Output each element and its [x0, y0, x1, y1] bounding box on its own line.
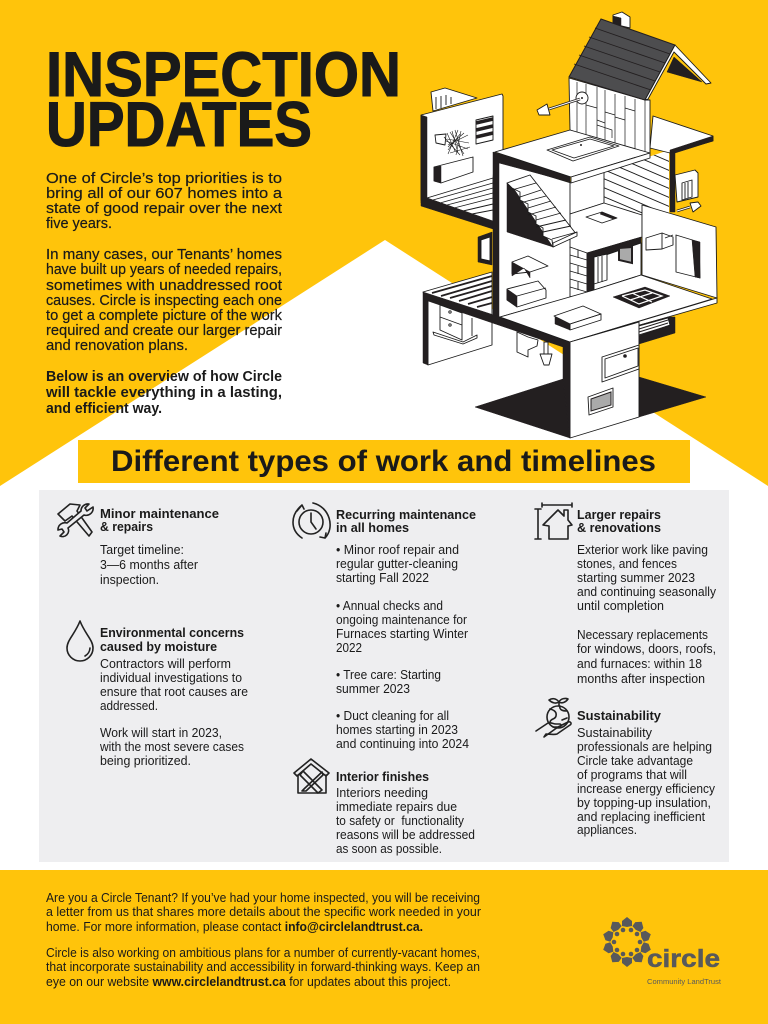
footer text: a letter from us that shares more details about the specific work needed in your — [46, 904, 482, 919]
section: recurring maintenance: • Duct cleaning for all — [336, 708, 449, 723]
section: recurring maintenance: starting Fall 2022 — [336, 570, 429, 585]
section: larger repairs: Exterior work like paving — [577, 542, 708, 557]
section: interior finishes: as soon as possible. — [336, 841, 442, 856]
icon: water drop — [67, 621, 93, 661]
intro text: Below is an overview of how Circle — [46, 369, 282, 385]
chimney — [613, 12, 630, 28]
section: environmental concerns: individual investigations to — [100, 670, 242, 685]
section: interior finishes: Interiors needing — [336, 785, 428, 800]
section: environmental concerns: Contractors will perform — [100, 656, 231, 671]
icon: hammer and wrench — [58, 504, 93, 537]
heading band: Different types of work and timelines — [111, 445, 656, 478]
section: environmental concerns: Environmental concerns — [100, 625, 244, 640]
section: interior finishes: reasons will be addressed — [336, 827, 475, 842]
shadow under house — [475, 377, 706, 438]
house illustration — [421, 12, 717, 438]
footer text — [46, 890, 482, 989]
section: environmental concerns: Work will start in 2023, — [100, 725, 222, 740]
section: environmental concerns: being prioritized. — [100, 753, 191, 768]
staircase — [507, 175, 577, 247]
intro text: and renovation plans. — [46, 338, 188, 354]
section: interior finishes: to safety or functionality — [336, 813, 464, 828]
lower left wing — [423, 272, 570, 365]
icon: clock with arrows — [293, 503, 330, 538]
right upper wing — [604, 116, 714, 214]
section: minor maintenance: 3—6 months after — [100, 557, 199, 572]
low steps and shelf — [507, 256, 548, 307]
section: sustainability: of programs that will — [577, 767, 687, 782]
right room — [642, 205, 717, 298]
section: larger repairs: and furnaces: within 18 — [577, 656, 702, 671]
section: recurring maintenance: summer 2023 — [336, 681, 410, 696]
section: larger repairs: until completion — [577, 598, 664, 613]
section: larger repairs: Larger repairs — [577, 507, 661, 522]
footer background — [0, 870, 768, 1024]
section: larger repairs: for windows, doors, roofs, — [577, 641, 716, 656]
intro text: state of good repair over the next — [46, 201, 282, 217]
footer text: Are you a Circle Tenant? If you’ve had your home inspected, you will be receiving — [46, 890, 480, 905]
section: recurring maintenance — [336, 507, 476, 751]
section: minor maintenance: & repairs — [100, 519, 153, 534]
section: sustainability: Sustainability — [577, 725, 652, 740]
logo wordmark — [647, 945, 722, 986]
section: recurring maintenance: 2022 — [336, 640, 362, 655]
section: larger repairs: and continuing seasonally — [577, 584, 716, 599]
logo — [602, 917, 722, 986]
section: interior finishes — [336, 769, 475, 856]
attic walls — [569, 78, 650, 155]
heading band — [78, 440, 690, 483]
section: recurring maintenance: regular gutter-cleaning — [336, 556, 458, 571]
section: environmental concerns: addressed. — [100, 698, 158, 713]
section: minor maintenance: inspection. — [100, 572, 159, 587]
section: larger repairs: stones, and fences — [577, 556, 677, 571]
lower right wing — [639, 317, 675, 344]
hanging chair and pendant — [517, 332, 552, 365]
grey panel — [39, 490, 729, 862]
logo mark — [602, 917, 652, 967]
back room — [594, 243, 641, 290]
intro text: In many cases, our Tenants’ homes — [46, 247, 282, 263]
section: recurring maintenance: • Minor roof repair and — [336, 542, 459, 557]
section: recurring maintenance: in all homes — [336, 520, 409, 535]
section: recurring maintenance: Furnaces starting Winter — [336, 626, 469, 641]
icon: globe in hand with sprout — [536, 698, 571, 737]
icon: interior finishes house — [294, 759, 329, 793]
logo wordmark: circle — [647, 945, 720, 973]
section: larger repairs: Necessary replacements — [577, 627, 708, 642]
section: recurring maintenance: ongoing maintenance for — [336, 612, 468, 627]
section: sustainability: Circle take advantage — [577, 753, 693, 768]
section: sustainability: professionals are helping — [577, 739, 712, 754]
section: environmental concerns — [99, 625, 248, 768]
title — [46, 40, 401, 160]
title: UPDATES — [46, 90, 312, 160]
footer text: Circle is also working on ambitious plans for a number of currently-vacant homes, — [46, 945, 480, 960]
top slab — [495, 130, 650, 183]
section: environmental concerns: with the most severe cases — [99, 739, 244, 754]
section: recurring maintenance: Recurring maintenance — [336, 507, 476, 522]
title: INSPECTION — [46, 40, 401, 110]
section: sustainability: Sustainability — [577, 708, 662, 723]
section: sustainability: increase energy efficiency — [577, 781, 715, 796]
footer text: that incorporate sustainability and accessibility in forward-thinking ways. Keep an — [46, 959, 480, 974]
roof — [569, 19, 711, 100]
section: minor maintenance: Target timeline: — [100, 542, 184, 557]
section: recurring maintenance: and continuing into 2024 — [336, 736, 469, 751]
skylight and brick wall — [570, 212, 641, 297]
section: sustainability — [577, 708, 715, 837]
icon: house with dimensions — [535, 503, 572, 539]
window on left wall — [478, 232, 492, 265]
left upper wing — [421, 88, 503, 229]
section: larger repairs: starting summer 2023 — [577, 570, 695, 585]
intro text: causes. Circle is inspecting each one — [46, 293, 282, 309]
intro text: required and create our larger repair — [46, 323, 282, 339]
section: sustainability: and replacing inefficient — [577, 809, 705, 824]
lower floor slab — [500, 275, 717, 345]
dresser — [433, 305, 477, 344]
intro text: and efficient way. — [46, 401, 162, 417]
section: recurring maintenance: • Annual checks and — [336, 598, 443, 613]
section: recurring maintenance: • Tree care: Starting — [336, 667, 441, 682]
section: environmental concerns: caused by moisture — [100, 639, 217, 654]
footer text: home. For more information, please contact info@circlelandtrust.ca. — [46, 919, 423, 934]
section: interior finishes: Interior finishes — [336, 769, 429, 784]
footer text: eye on our website www.circlelandtrust.ca for updates about this project. — [46, 974, 451, 989]
section: environmental concerns: ensure that root causes are — [100, 684, 248, 699]
intro text: five years. — [46, 216, 112, 232]
intro text: to get a complete picture of the work — [46, 308, 283, 324]
section: larger repairs: months after inspection — [577, 671, 705, 686]
column — [563, 322, 639, 438]
intro text: have built up years of needed repairs, — [46, 262, 282, 278]
section: sustainability: appliances. — [577, 822, 637, 837]
section: larger repairs — [577, 507, 716, 686]
section: minor maintenance: Minor maintenance — [100, 506, 219, 521]
section: larger repairs: & renovations — [577, 520, 661, 535]
section: recurring maintenance: homes starting in 2023 — [336, 722, 458, 737]
intro text: will tackle everything in a lasting, — [45, 385, 282, 401]
lamp and doorbell — [537, 92, 588, 115]
section: minor maintenance — [100, 506, 219, 587]
intro text — [45, 171, 283, 417]
intro text: One of Circle’s top priorities is to — [46, 171, 282, 187]
intro text: bring all of our 607 homes into a — [46, 186, 283, 202]
section: interior finishes: immediate repairs due — [336, 799, 457, 814]
logo wordmark: Community LandTrust — [647, 977, 722, 986]
section: sustainability: by topping-up insulation, — [577, 795, 711, 810]
intro text: sometimes with unaddressed root — [46, 278, 282, 294]
main body walls — [493, 152, 642, 317]
